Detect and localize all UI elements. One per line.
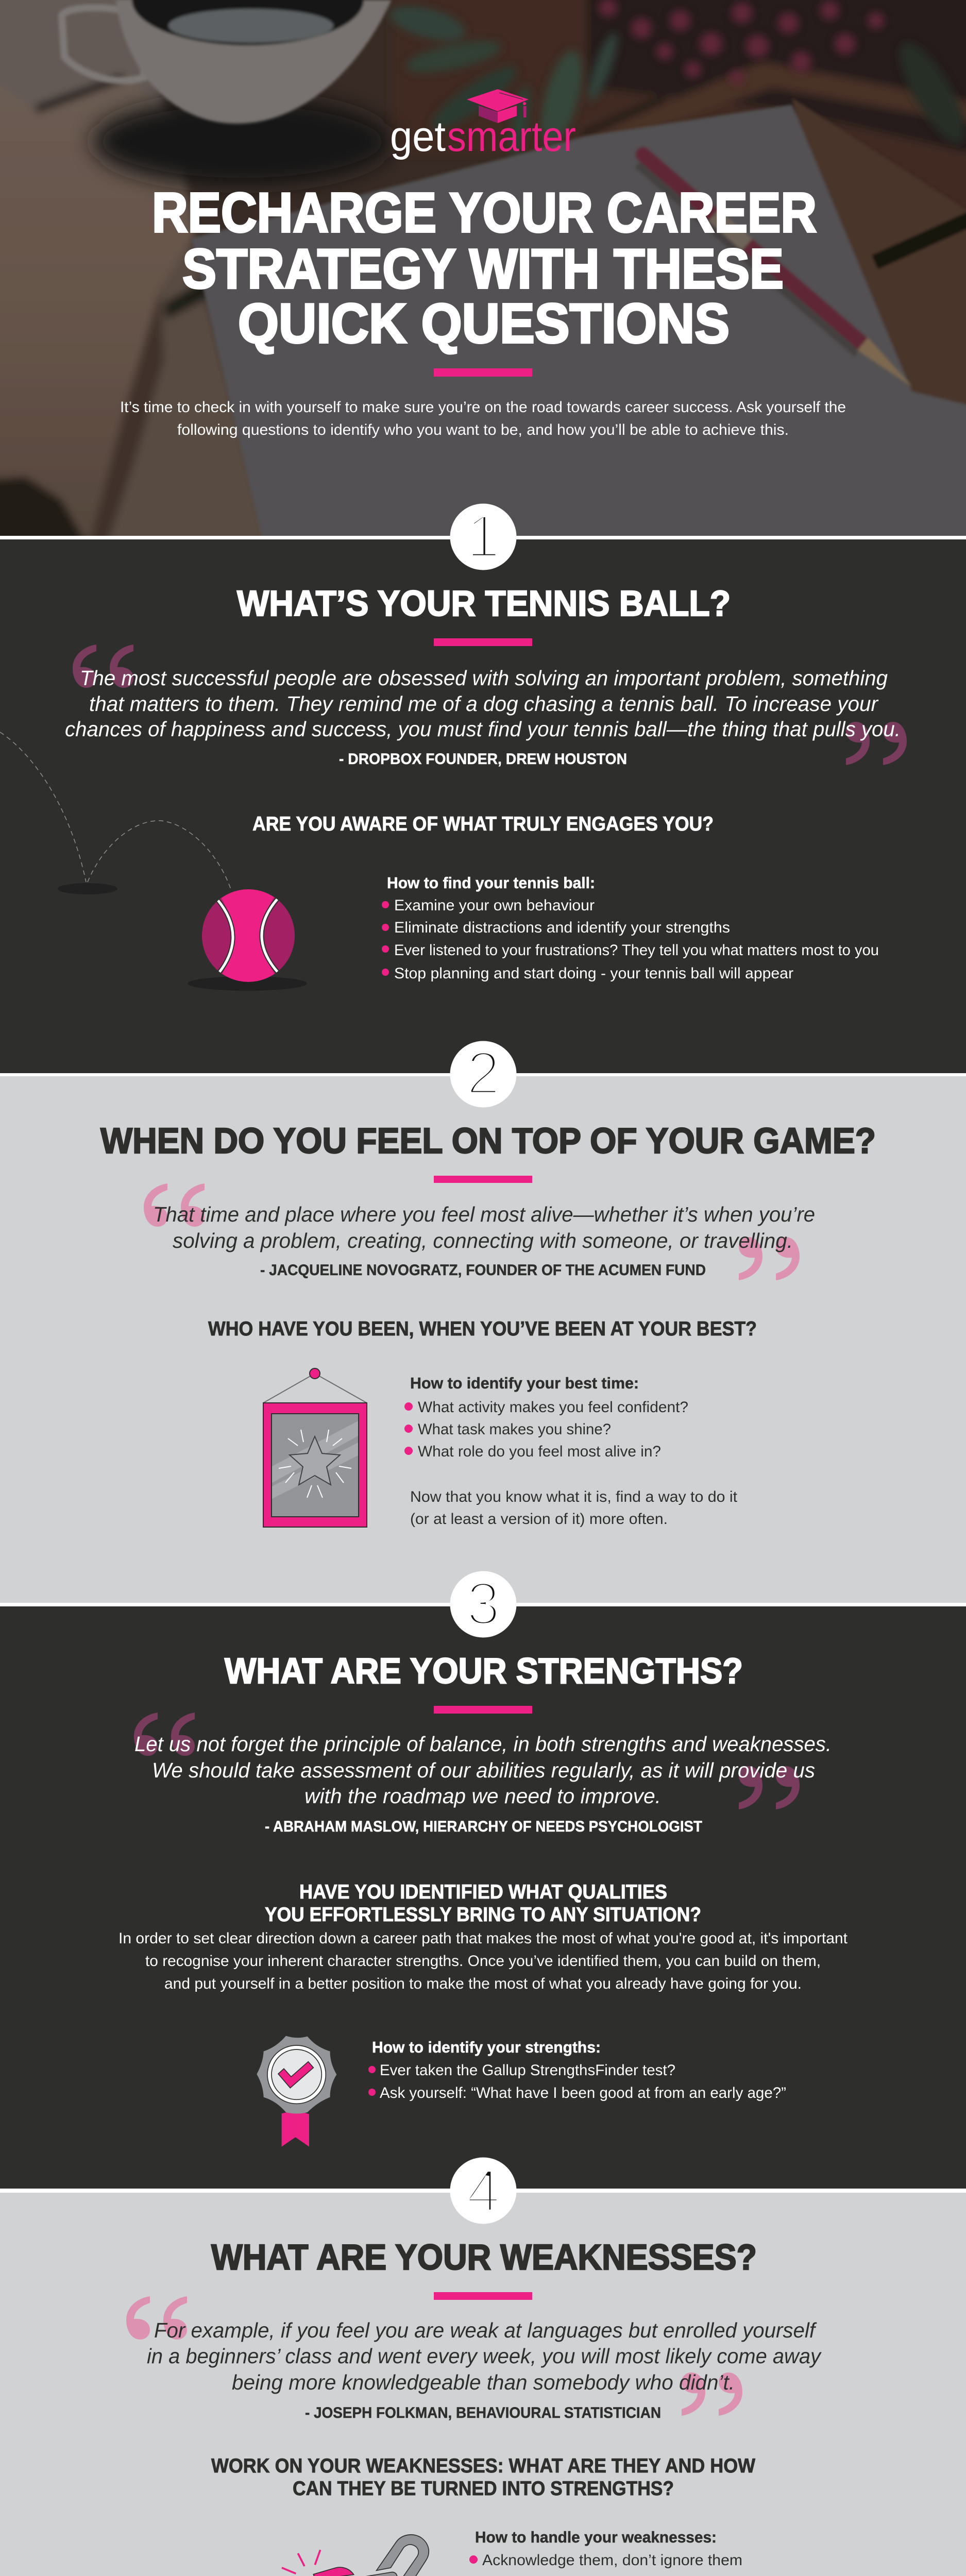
section 2 subheading: WHO HAVE YOU BEEN, WHEN YOU’VE BEEN AT YOUR BEST? <box>208 1318 757 1340</box>
section 1 quote: chances of happiness and success, you must find your tennis ball—the thing that pulls you. <box>65 717 901 741</box>
title divider <box>434 368 532 377</box>
coffee cup <box>62 0 392 124</box>
section 4 subheading <box>211 2455 755 2500</box>
section 4 tips list: Acknowledge them, don’t ignore them <box>482 2552 742 2569</box>
icon: award badge <box>257 2036 336 2147</box>
section 2 attribution: - JACQUELINE NOVOGRATZ, FOUNDER OF THE ACUMEN FUND <box>260 1262 706 1279</box>
section 3 background <box>0 1603 966 2193</box>
section 3 opening quote mark <box>134 1713 195 1756</box>
section 4 background <box>0 2189 966 2576</box>
leaves and berries <box>386 0 966 158</box>
section 1 attribution: - DROPBOX FOUNDER, DREW HOUSTON <box>339 751 627 768</box>
section 2 tips list <box>404 1374 738 1528</box>
title: RECHARGE YOUR CAREER <box>152 181 817 244</box>
hero background photo <box>0 0 966 550</box>
section 1 quote <box>65 666 901 741</box>
section 3 quote <box>134 1732 832 1808</box>
number badge 1: 1 <box>466 502 500 570</box>
logo: smarter <box>447 112 576 160</box>
section 3 tips list: Ever taken the Gallup StrengthsFinder test? <box>380 2062 675 2079</box>
section 3 quote: Let us not forget the principle of balance, in both strengths and weaknesses. <box>134 1732 832 1756</box>
section 1 tips list: Ever listened to your frustrations? They tell you what matters most to you <box>394 942 879 959</box>
section 2 heading: WHEN DO YOU FEEL ON TOP OF YOUR GAME? <box>100 1121 876 1161</box>
section 4 subheading: CAN THEY BE TURNED INTO STRENGTHS? <box>293 2478 674 2500</box>
section 3 body text: In order to set clear direction down a career path that makes the most of what you're good at, it's important <box>118 1930 848 1947</box>
section 3 body text: and put yourself in a better position to make the most of what you already have going for you. <box>164 1975 802 1992</box>
section 4 closing quote mark <box>682 2372 742 2416</box>
section 4 subheading: WORK ON YOUR WEAKNESSES: WHAT ARE THEY AND HOW <box>211 2455 755 2477</box>
section 2 tips list: How to identify your best time: <box>410 1374 639 1392</box>
section 1 tips list: How to find your tennis ball: <box>387 874 595 892</box>
section 3 subheading: YOU EFFORTLESSLY BRING TO ANY SITUATION? <box>265 1904 701 1926</box>
section 2 background <box>0 1073 966 1606</box>
section 4 quote: in a beginners’ class and went every week, you will most likely come away <box>147 2344 822 2368</box>
number badge 2: 2 <box>466 1039 500 1107</box>
logo <box>390 89 576 160</box>
section 1 quote: The most successful people are obsessed with solving an important problem, something <box>80 666 888 690</box>
section 2 tips list: What activity makes you feel confident? <box>418 1399 688 1416</box>
section 4 attribution: - JOSEPH FOLKMAN, BEHAVIOURAL STATISTICIAN <box>305 2404 661 2421</box>
section 4 quote: For example, if you feel you are weak at languages but enrolled yourself <box>154 2318 817 2342</box>
pen <box>639 155 913 387</box>
title <box>152 181 817 355</box>
section 3 subheading: HAVE YOU IDENTIFIED WHAT QUALITIES <box>299 1881 667 1903</box>
title: QUICK QUESTIONS <box>238 292 730 355</box>
section 3 attribution: - ABRAHAM MASLOW, HIERARCHY OF NEEDS PSYCHOLOGIST <box>265 1818 702 1835</box>
notebook paper and table <box>191 98 966 550</box>
section 1 tips list: Stop planning and start doing - your tennis ball will appear <box>394 965 793 982</box>
section 3 tips list: How to identify your strengths: <box>372 2038 601 2056</box>
section 3 quote: We should take assessment of our abilities regularly, as it will provide us <box>152 1758 815 1782</box>
number badge 3 <box>450 1570 516 1637</box>
number badge 4 <box>450 2157 516 2224</box>
section 2 tips list: Now that you know what it is, find a way to do it <box>410 1488 738 1505</box>
section 4 quote: being more knowledgeable than somebody who didn’t. <box>232 2370 735 2394</box>
section 1: tennis ball <box>0 536 966 1077</box>
section 3 tips list: Ask yourself: “What have I been good at from an early age?” <box>380 2084 786 2102</box>
section 1 heading: WHAT’S YOUR TENNIS BALL? <box>237 583 731 623</box>
section 2 tips list: What task makes you shine? <box>418 1421 611 1438</box>
section 2 closing quote mark <box>739 1237 800 1280</box>
section 2 quote <box>153 1202 815 1252</box>
title: STRATEGY WITH THESE <box>182 238 784 300</box>
section 2 opening quote mark <box>144 1183 205 1227</box>
section 3 subheading <box>265 1881 701 1926</box>
number badge 2 <box>450 1039 516 1108</box>
section 3: strengths <box>0 1603 966 2193</box>
section 2 quote: solving a problem, creating, connecting with someone, or travelling. <box>173 1229 793 1252</box>
number badge 1 <box>450 502 516 570</box>
number badge 3: 3 <box>466 1570 500 1637</box>
section 4 heading: WHAT ARE YOUR WEAKNESSES? <box>211 2237 757 2277</box>
section 4 tips list <box>469 2528 795 2576</box>
section 1 subheading: ARE YOU AWARE OF WHAT TRULY ENGAGES YOU? <box>252 813 714 835</box>
section 2 quote: That time and place where you feel most alive—whether it’s when you’re <box>153 1202 815 1226</box>
hero section <box>0 0 966 550</box>
section 3 quote: with the roadmap we need to improve. <box>304 1784 661 1808</box>
section 1 tips list <box>382 874 879 982</box>
section 3 body text: to recognise your inherent character strengths. Once you’ve identified them, you can build on them, <box>145 1953 821 1970</box>
section 1 tips list: Eliminate distractions and identify your strengths <box>394 919 730 936</box>
section 3 closing quote mark <box>739 1766 800 1809</box>
section 1 opening quote mark <box>73 645 133 688</box>
section 4 opening quote mark <box>126 2296 187 2340</box>
section 1 quote: that matters to them. They remind me of a dog chasing a tennis ball. To increase your <box>89 692 879 716</box>
icon: bouncing tennis ball <box>0 732 307 991</box>
icon: broken chain <box>198 2535 429 2576</box>
section 2 tips list: (or at least a version of it) more often. <box>410 1511 668 1528</box>
section 1 closing quote mark <box>846 722 907 765</box>
intro text: following questions to identify who you want to be, and how you’ll be able to achieve this. <box>177 421 789 438</box>
section 3 tips list <box>368 2038 786 2102</box>
section 1 tips list: Examine your own behaviour <box>394 897 595 914</box>
section 2 tips list: What role do you feel most alive in? <box>418 1443 661 1460</box>
intro text <box>120 399 846 438</box>
section 2: top of your game <box>0 1073 966 1606</box>
section 4: weaknesses <box>0 2189 966 2576</box>
section 3 body text <box>118 1930 848 1992</box>
section 3 heading: WHAT ARE YOUR STRENGTHS? <box>225 1651 743 1691</box>
cup shadow <box>93 98 392 185</box>
logo: get <box>390 112 446 160</box>
section 1 background <box>0 536 966 1077</box>
intro text: It’s time to check in with yourself to make sure you’re on the road towards career success. Ask yourself the <box>120 399 846 416</box>
section 4 quote <box>147 2318 822 2394</box>
section 4 tips list: How to handle your weaknesses: <box>475 2528 717 2546</box>
number badge 4: 4 <box>466 2157 500 2224</box>
icon: framed star <box>263 1368 367 1527</box>
